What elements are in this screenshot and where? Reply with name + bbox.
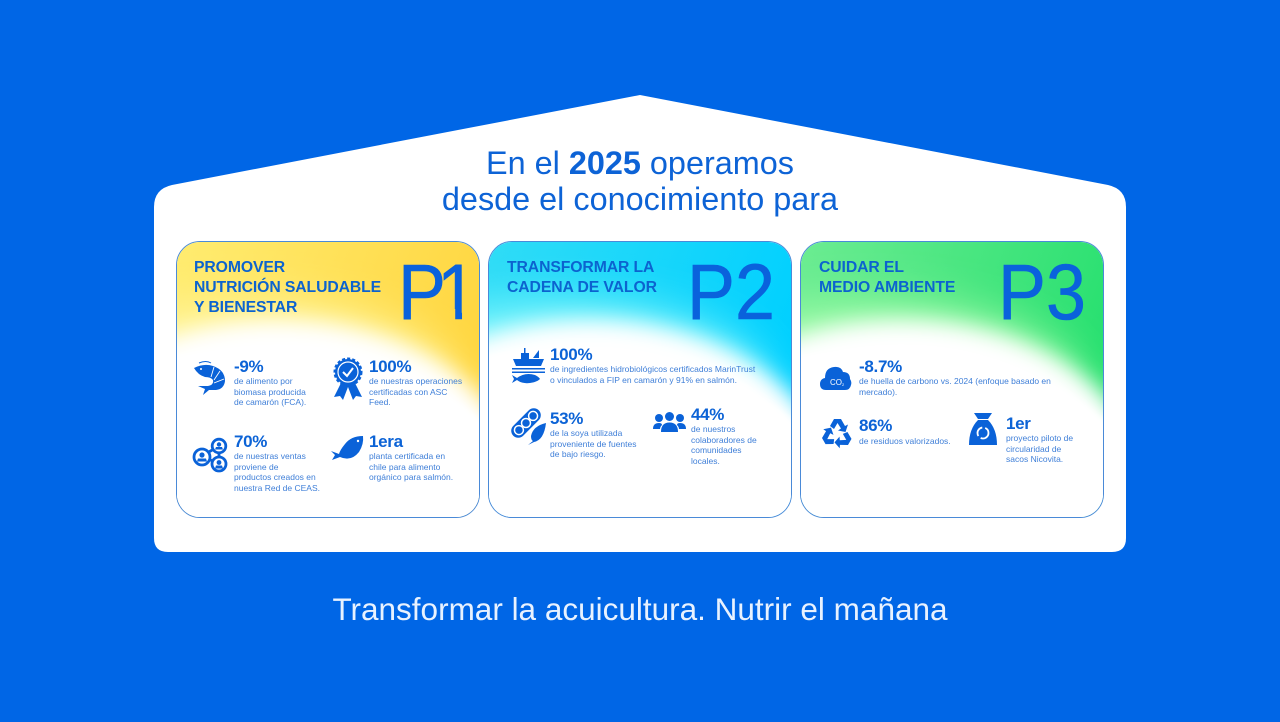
text: 70% [234,451,320,493]
stat: 1era: 1era [369,432,403,451]
text: 53% [550,428,636,459]
text: 44%: locales. [691,456,720,466]
panel: P1 nutrition [176,241,480,518]
text: 1er [1006,433,1073,464]
icon: CO2 cloud: CO [830,378,842,387]
text: -8.7%: mercado). [859,387,897,397]
title [442,145,838,217]
stat: 44%: 44% [691,405,724,424]
text: 1er: circularidad de [1006,444,1061,454]
icon: CO2 cloud: 2 [842,382,845,387]
heading: Y BIENESTAR [194,299,297,316]
stat: -8.7%: -8.7% [859,357,902,376]
text: 1er: sacos Nicovita. [1006,454,1063,464]
text: -9%: de alimento por [234,376,293,386]
icon: CO2 cloud [820,366,852,390]
heading: NUTRICIÓN SALUDABLE [194,279,381,296]
icon: recycle [822,419,852,448]
text: -9%: biomasa producida [234,387,306,397]
stat: 100%: 100% [369,357,411,376]
icon: salmon [331,436,364,460]
P2 label: P2 [687,247,775,336]
text: 44%: de nuestros [691,424,735,434]
P1 label: 1 [437,247,477,336]
text: 70%: nuestra Red de CEAS. [234,483,320,493]
icon: fishing boat and fish [512,348,545,384]
heading: TRANSFORMAR LA [507,259,654,276]
text: 86%: de residuos valorizados. [859,436,951,446]
text: 1era: planta certificada en [369,451,445,461]
heading: CADENA DE VALOR [507,279,657,296]
text: 70%: proviene de [234,462,278,472]
text: 70%: productos creados en [234,472,316,482]
text: 44% [691,424,757,466]
stat: 100%: 100% [550,345,592,364]
heading [819,259,955,296]
text: 1era: chile para alimento [369,462,440,472]
text: 100%: de nuestras operaciones [369,376,462,386]
tagline: Transformar la acuicultura. Nutrir el mañana [332,591,948,627]
text: 100%: o vinculados a FIP en camarón y 91% en salmón. [550,375,737,385]
text: 1era: orgánico para salmón. [369,472,453,482]
panel: P3 environment [800,241,1104,518]
P3 label: P3 [998,247,1086,336]
icon: group of people [653,412,686,432]
panel: P2 value chain [488,241,792,518]
heading [194,259,381,316]
text: 53%: proveniente de fuentes [550,439,636,449]
text: -8.7% [859,376,1051,397]
text: 1er: proyecto piloto de [1006,433,1073,443]
heading: PROMOVER [194,259,285,276]
text: -9% [234,376,306,407]
text: 44%: comunidades [691,445,742,455]
heading: MEDIO AMBIENTE [819,279,955,296]
icon: award ribbon [334,358,362,400]
text: -9%: de camarón (FCA). [234,397,306,407]
text: 100%: de ingredientes hidrobiológicos certificados MarinTrust [550,364,755,374]
heading: CUIDAR EL [819,259,904,276]
text: -8.7%: de huella de carbono vs. 2024 (enfoque basado en [859,376,1051,386]
P1 label: P [398,247,446,336]
stat: -9%: -9% [234,357,263,376]
title: En el 2025 operamos [486,145,794,181]
stat: 86%: 86% [859,416,892,435]
text: 100%: certificadas con ASC [369,387,447,397]
stat: 1er: 1er [1006,414,1031,433]
stat: 53%: 53% [550,409,583,428]
text: 53%: de bajo riesgo. [550,449,606,459]
text: 100% [550,364,756,385]
text: 1era [369,451,453,482]
title: desde el conocimiento para [442,181,838,217]
text: 44%: colaboradores de [691,435,757,445]
stat: 70%: 70% [234,432,267,451]
icon: network of people [192,438,228,472]
heading [507,259,657,296]
text: 53%: de la soya utilizada [550,428,622,438]
icon: shrimp [194,361,225,395]
icon: sack [969,413,997,445]
text: 70%: de nuestras ventas [234,451,306,461]
text: 100% [369,376,462,407]
text: 100%: Feed. [369,397,391,407]
icon: soy and leaf [511,408,546,445]
